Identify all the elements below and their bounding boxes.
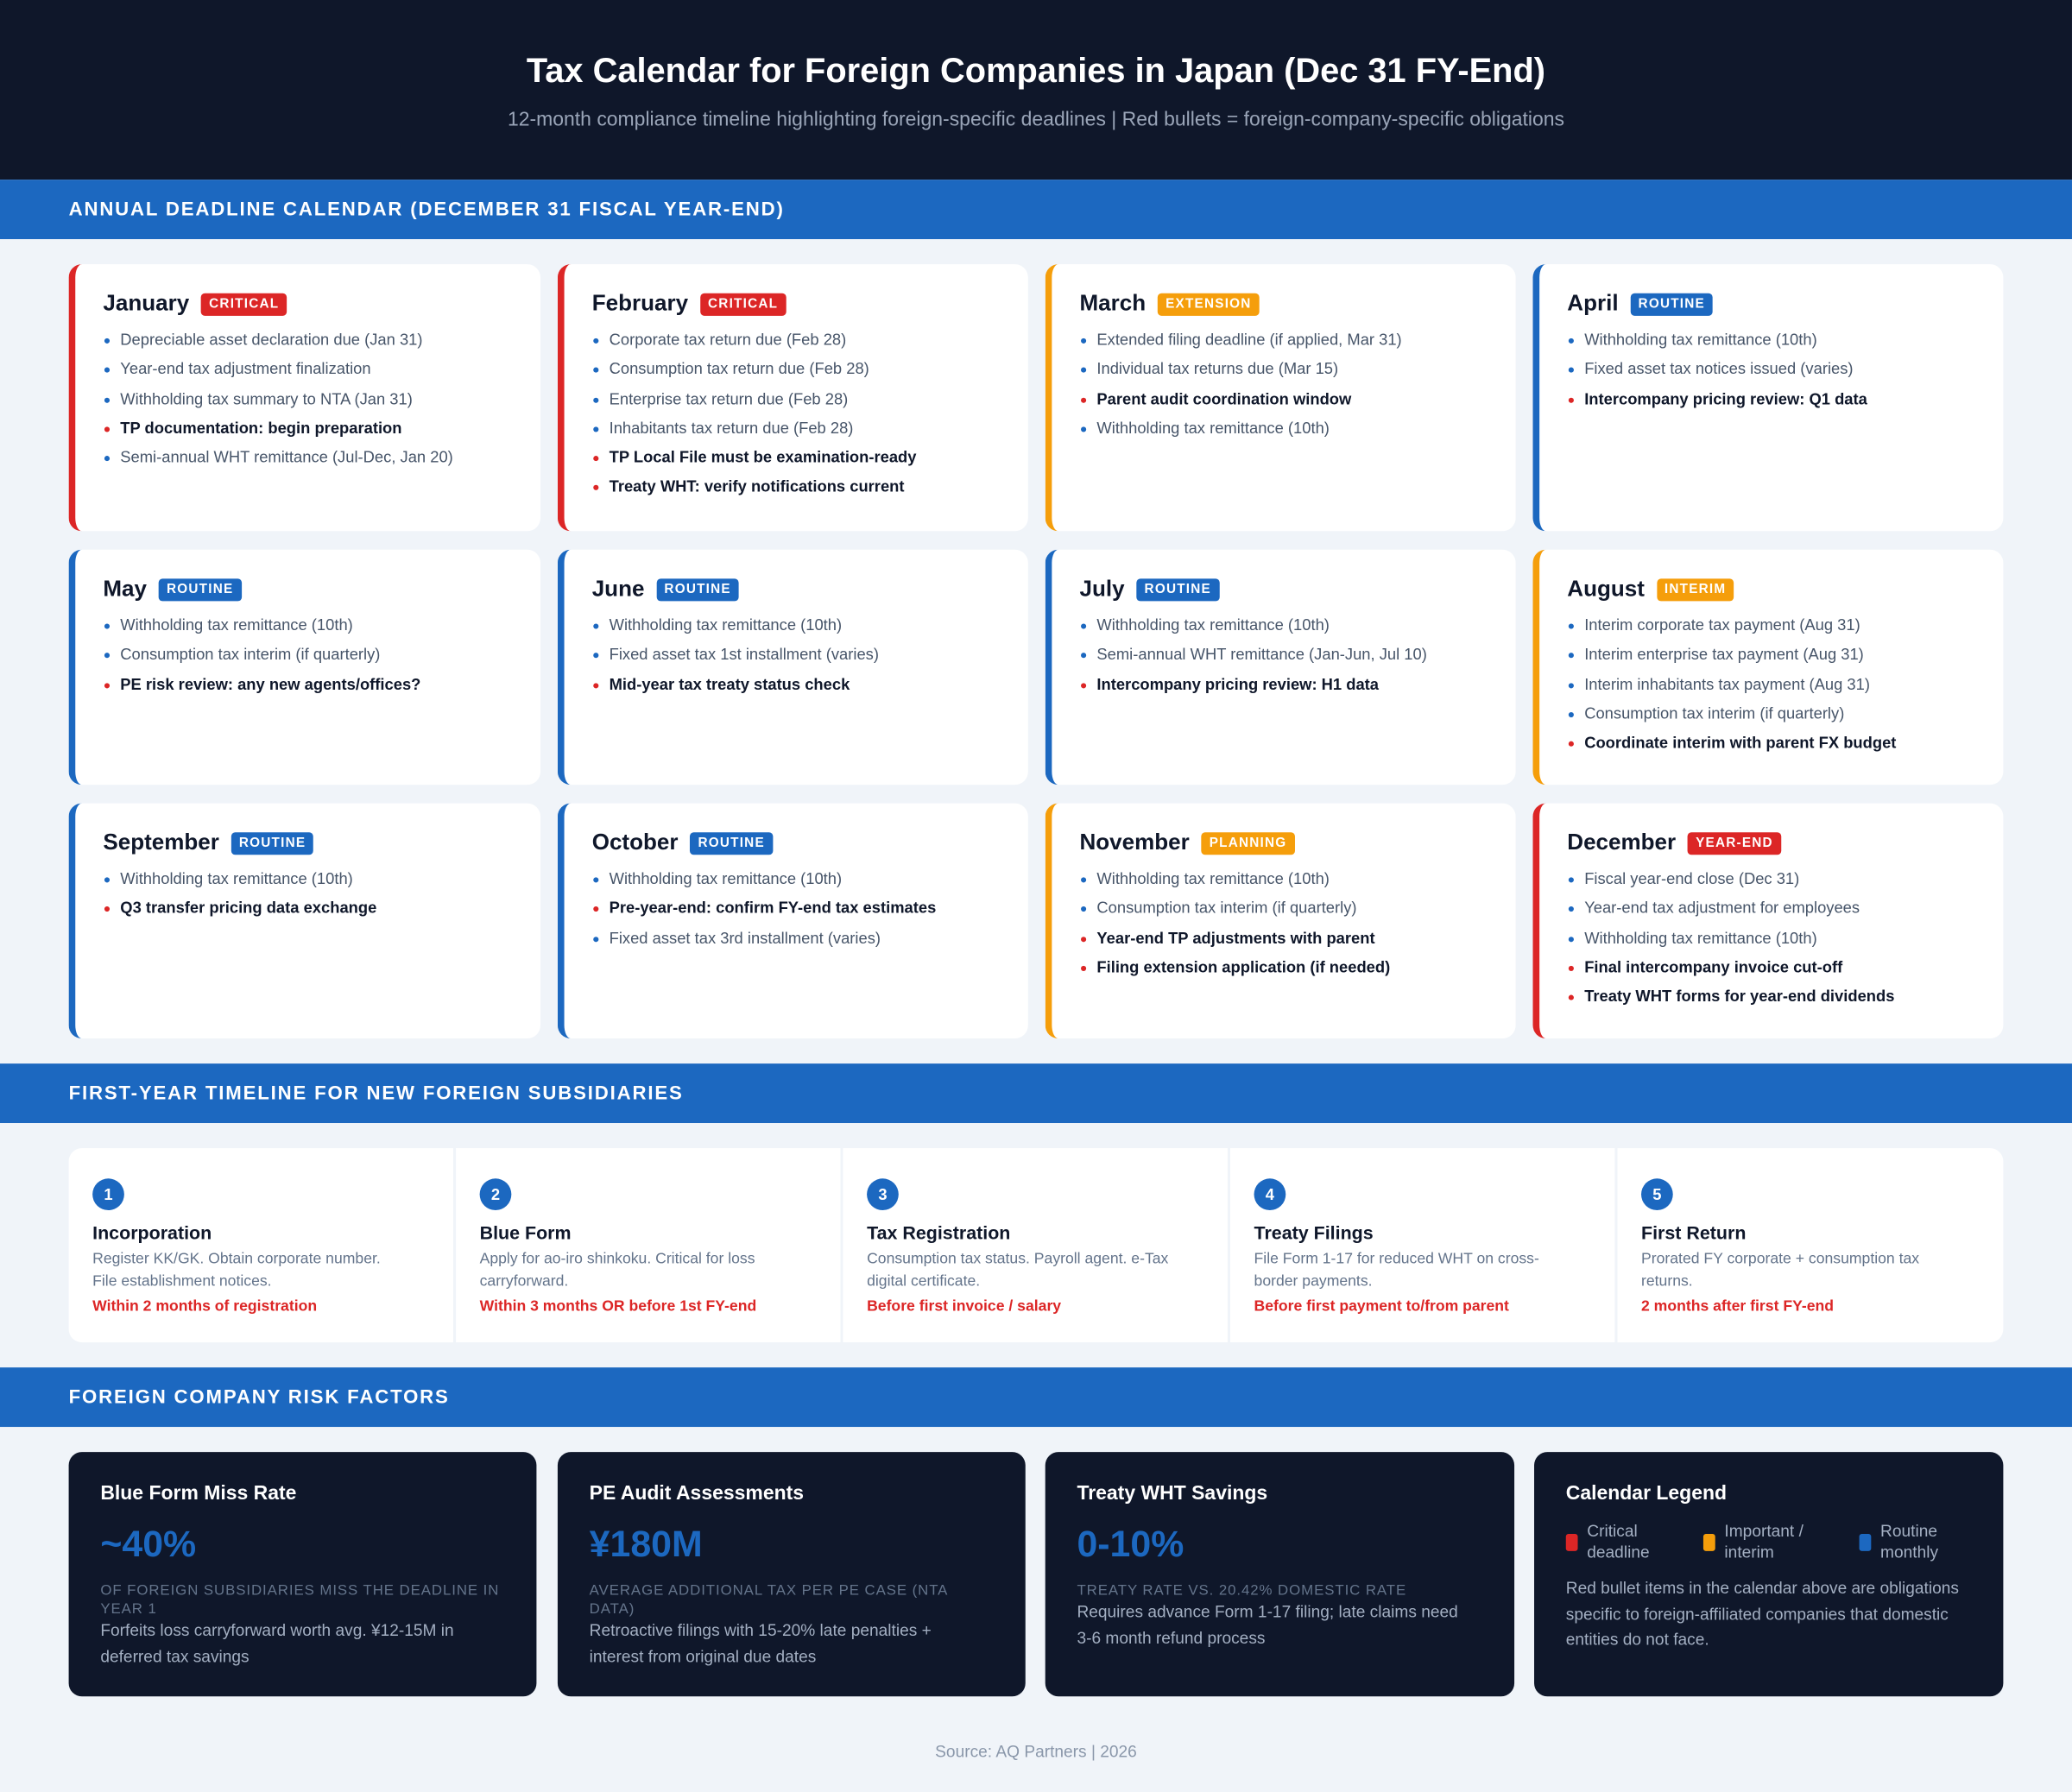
step 3: Consumption tax status. Payroll agent. e-Tax digital certificate. bbox=[867, 1251, 1168, 1290]
step 5: 5 bbox=[1652, 1185, 1661, 1203]
card: May bbox=[69, 550, 540, 785]
legend: monthly bbox=[1880, 1543, 1938, 1562]
card: June: ROUTINE bbox=[664, 582, 731, 596]
section bar: risk factors bbox=[0, 1367, 2072, 1427]
risk: treaty WHT bbox=[1045, 1452, 1514, 1696]
card: April: ROUTINE bbox=[1639, 297, 1705, 311]
step 3 bbox=[843, 1148, 1228, 1342]
header bbox=[0, 0, 2072, 180]
risk: blue form: OF FOREIGN SUBSIDIARIES MISS THE DEADLINE IN YEAR 1 bbox=[100, 1583, 499, 1617]
card: August: INTERIM bbox=[1665, 582, 1726, 596]
step 3: Tax Registration bbox=[867, 1222, 1010, 1243]
header: Tax Calendar for Foreign Companies in Japan (Dec 31 FY-End) bbox=[527, 50, 1545, 90]
step 4: Treaty Filings bbox=[1254, 1222, 1374, 1243]
card: March: Extended filing deadline (if applied, Mar 31) bbox=[1096, 331, 1402, 349]
step 3: Before first invoice / salary bbox=[867, 1299, 1061, 1315]
card: June: June bbox=[592, 576, 644, 601]
card: February: Corporate tax return due (Feb 28) bbox=[610, 331, 846, 349]
card: November: Filing extension application (if needed) bbox=[1096, 958, 1390, 976]
card: May: PE risk review: any new agents/offices? bbox=[120, 675, 420, 693]
card: May: ROUTINE bbox=[167, 582, 233, 596]
step 4 bbox=[1230, 1148, 1614, 1342]
risk: blue form bbox=[69, 1452, 536, 1696]
card: January: Year-end tax adjustment finalization bbox=[120, 360, 371, 378]
step 1: Within 2 months of registration bbox=[92, 1299, 317, 1315]
card: January bbox=[69, 264, 540, 531]
card: June: Fixed asset tax 1st installment (varies) bbox=[610, 645, 879, 664]
card: December: Withholding tax remittance (10th) bbox=[1584, 928, 1817, 947]
step 5 bbox=[1617, 1148, 2003, 1342]
card: September: ROUTINE bbox=[239, 836, 306, 850]
card: April: April bbox=[1567, 291, 1619, 316]
card: December: Year-end tax adjustment for employees bbox=[1584, 899, 1860, 918]
risk: treaty WHT: Requires advance Form 1-17 filing; late claims need 3-6 month refund process bbox=[1077, 1603, 1458, 1647]
risk: treaty WHT: 0-10% bbox=[1077, 1524, 1184, 1564]
card: February: Consumption tax return due (Feb 28) bbox=[610, 360, 869, 378]
risk: blue form: Blue Form Miss Rate bbox=[100, 1482, 296, 1505]
card: January: Semi-annual WHT remittance (Jul-Dec, Jan 20) bbox=[120, 448, 453, 467]
card: May: May bbox=[103, 576, 147, 601]
card: March: Parent audit coordination window bbox=[1096, 389, 1351, 407]
card: February: February bbox=[592, 291, 688, 316]
card: July: Intercompany pricing review: H1 data bbox=[1096, 675, 1379, 693]
step 2: Within 3 months OR before 1st FY-end bbox=[480, 1299, 756, 1315]
card: November: November bbox=[1080, 830, 1190, 855]
legend: interim bbox=[1724, 1543, 1774, 1562]
card: November: Withholding tax remittance (10th) bbox=[1096, 869, 1330, 888]
card: September: Withholding tax remittance (10th) bbox=[120, 869, 353, 888]
legend: Red bullet items in the calendar above are obligations specific to foreign-affiliated companies that domestic entities do not face. bbox=[1566, 1579, 1959, 1649]
card: July: July bbox=[1080, 576, 1125, 601]
step 2: Blue Form bbox=[480, 1222, 572, 1243]
section bar: first-year timeline: FIRST-YEAR TIMELINE FOR NEW FOREIGN SUBSIDIARIES bbox=[69, 1083, 684, 1105]
card: January: TP documentation: begin preparation bbox=[120, 419, 401, 437]
card: October: Fixed asset tax 3rd installment (varies) bbox=[610, 928, 881, 947]
card: October bbox=[558, 804, 1028, 1038]
card: October: Pre-year-end: confirm FY-end tax estimates bbox=[610, 899, 936, 918]
step 4: File Form 1-17 for reduced WHT on cross-border payments. bbox=[1254, 1251, 1539, 1290]
card: April: Withholding tax remittance (10th) bbox=[1584, 331, 1817, 349]
card: June: Mid-year tax treaty status check bbox=[610, 675, 850, 693]
legend: Calendar Legend bbox=[1566, 1482, 1727, 1505]
card: September: Q3 transfer pricing data exchange bbox=[120, 899, 376, 918]
card: April: Intercompany pricing review: Q1 data bbox=[1584, 389, 1867, 407]
card: April: Fixed asset tax notices issued (varies) bbox=[1584, 360, 1854, 378]
card: March: March bbox=[1080, 291, 1146, 316]
card: May: Consumption tax interim (if quarterly) bbox=[120, 645, 380, 664]
card: July: ROUTINE bbox=[1145, 582, 1211, 596]
card: December: Fiscal year-end close (Dec 31) bbox=[1584, 869, 1799, 888]
card: August: Interim enterprise tax payment (Aug 31) bbox=[1584, 645, 1864, 664]
section bar: annual calendar bbox=[0, 180, 2072, 239]
step 2 bbox=[456, 1148, 840, 1342]
risk: PE audit: ¥180M bbox=[590, 1524, 703, 1564]
risk: treaty WHT: TREATY RATE VS. 20.42% DOMESTIC RATE bbox=[1077, 1583, 1406, 1599]
card: March: Individual tax returns due (Mar 15) bbox=[1096, 360, 1338, 378]
card: August bbox=[1532, 550, 2003, 785]
card: August: August bbox=[1567, 576, 1645, 601]
card: May: Withholding tax remittance (10th) bbox=[120, 615, 353, 634]
card: October: ROUTINE bbox=[698, 836, 765, 850]
card: December bbox=[1532, 804, 2003, 1038]
card: November: PLANNING bbox=[1210, 836, 1286, 850]
step 1: Register KK/GK. Obtain corporate number. File establishment notices. bbox=[92, 1251, 381, 1290]
card: October: October bbox=[592, 830, 678, 855]
card: December: December bbox=[1567, 830, 1676, 855]
section bar: annual calendar: ANNUAL DEADLINE CALENDAR (DECEMBER 31 FISCAL YEAR-END) bbox=[69, 199, 785, 221]
step 2: 2 bbox=[491, 1185, 500, 1203]
card: November: Consumption tax interim (if quarterly) bbox=[1096, 899, 1357, 918]
step 5: 2 months after first FY-end bbox=[1641, 1299, 1834, 1315]
step 1 bbox=[69, 1148, 453, 1342]
legend: Routine bbox=[1880, 1522, 1937, 1541]
risk: PE audit: AVERAGE ADDITIONAL TAX PER PE CASE (NTA DATA) bbox=[590, 1583, 947, 1617]
card: July: Semi-annual WHT remittance (Jan-Jun, Jul 10) bbox=[1096, 645, 1427, 664]
card: February: Treaty WHT: verify notifications current bbox=[610, 477, 905, 496]
card: January: CRITICAL bbox=[209, 297, 279, 311]
card: January: Depreciable asset declaration due (Jan 31) bbox=[120, 331, 423, 349]
card: October: Withholding tax remittance (10th) bbox=[610, 869, 842, 888]
card: July bbox=[1045, 550, 1516, 785]
risk: PE audit: Retroactive filings with 15-20% late penalties + interest from original due dates bbox=[590, 1621, 932, 1665]
card: June bbox=[558, 550, 1028, 785]
card: March: EXTENSION bbox=[1166, 297, 1252, 311]
card: February: Inhabitants tax return due (Feb 28) bbox=[610, 419, 853, 437]
card: January: Withholding tax summary to NTA (Jan 31) bbox=[120, 389, 413, 407]
card: July: Withholding tax remittance (10th) bbox=[1096, 615, 1330, 634]
card: December: Final intercompany invoice cut-off bbox=[1584, 958, 1842, 976]
card: November: Year-end TP adjustments with parent bbox=[1096, 928, 1375, 947]
legend: deadline bbox=[1587, 1543, 1650, 1562]
legend: Important / bbox=[1724, 1522, 1804, 1541]
card: August: Interim inhabitants tax payment (Aug 31) bbox=[1584, 675, 1870, 693]
step 1: Incorporation bbox=[92, 1222, 212, 1243]
card: December: YEAR-END bbox=[1696, 836, 1773, 850]
risk: blue form: ~40% bbox=[100, 1524, 196, 1564]
legend: Critical bbox=[1587, 1522, 1638, 1541]
card: February bbox=[558, 264, 1028, 531]
card: April bbox=[1532, 264, 2003, 531]
step 5: First Return bbox=[1641, 1222, 1746, 1243]
card: January: January bbox=[103, 291, 189, 316]
footer source: Source: AQ Partners | 2026 bbox=[935, 1743, 1137, 1761]
section bar: risk factors: FOREIGN COMPANY RISK FACTORS bbox=[69, 1387, 450, 1409]
card: February: Enterprise tax return due (Feb 28) bbox=[610, 389, 848, 407]
risk: blue form: Forfeits loss carryforward worth avg. ¥12-15M in deferred tax savings bbox=[100, 1621, 454, 1665]
legend bbox=[1534, 1452, 2003, 1696]
card: September bbox=[69, 804, 540, 1038]
card: June: Withholding tax remittance (10th) bbox=[610, 615, 842, 634]
step 4: 4 bbox=[1266, 1185, 1274, 1203]
step 5: Prorated FY corporate + consumption tax returns. bbox=[1641, 1251, 1919, 1290]
step 3: 3 bbox=[878, 1185, 888, 1203]
card: February: CRITICAL bbox=[708, 297, 778, 311]
step 4: Before first payment to/from parent bbox=[1254, 1299, 1509, 1315]
card: March: Withholding tax remittance (10th) bbox=[1096, 419, 1330, 437]
card: February: TP Local File must be examination-ready bbox=[610, 448, 916, 467]
card: August: Coordinate interim with parent FX budget bbox=[1584, 734, 1896, 752]
risk: treaty WHT: Treaty WHT Savings bbox=[1077, 1482, 1267, 1505]
card: November bbox=[1045, 804, 1516, 1038]
card: September: September bbox=[103, 830, 219, 855]
card: August: Interim corporate tax payment (Aug 31) bbox=[1584, 615, 1860, 634]
step 2: Apply for ao-iro shinkoku. Critical for loss carryforward. bbox=[480, 1251, 755, 1290]
risk: PE audit: PE Audit Assessments bbox=[590, 1482, 804, 1505]
card: December: Treaty WHT forms for year-end dividends bbox=[1584, 987, 1894, 1006]
risk: PE audit bbox=[558, 1452, 1026, 1696]
card: August: Consumption tax interim (if quarterly) bbox=[1584, 704, 1844, 722]
step 1: 1 bbox=[104, 1185, 113, 1203]
section bar: first-year timeline bbox=[0, 1063, 2072, 1123]
header: 12-month compliance timeline highlighting foreign-specific deadlines | Red bullets = foreign-company-specific obligations bbox=[508, 109, 1564, 131]
card: March bbox=[1045, 264, 1516, 531]
